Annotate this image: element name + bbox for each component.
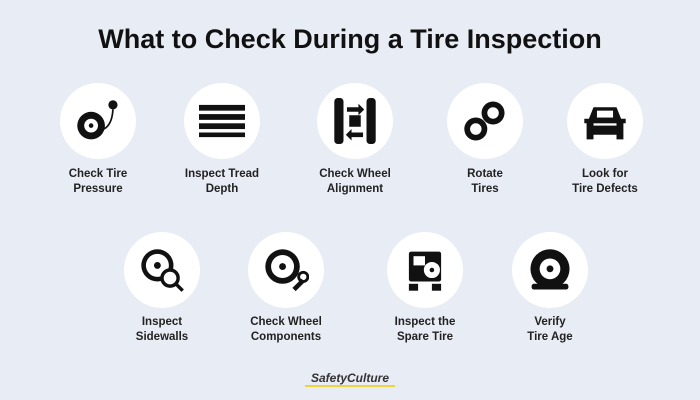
item: inspect spare tire bbox=[387, 232, 463, 308]
item: look for tire defects bbox=[567, 83, 643, 159]
label: inspect sidewalls bbox=[136, 316, 188, 343]
label: check wheel alignment: Alignment bbox=[327, 183, 383, 195]
label: inspect sidewalls: Sidewalls bbox=[136, 331, 188, 343]
label: look for tire defects: Tire Defects bbox=[572, 183, 638, 195]
item: verify tire age bbox=[512, 232, 588, 308]
label: inspect tread depth: Depth bbox=[206, 183, 238, 195]
label: inspect tread depth bbox=[185, 168, 259, 195]
label: inspect sidewalls: Inspect bbox=[142, 316, 182, 328]
label: check wheel components bbox=[250, 316, 322, 343]
item: inspect sidewalls bbox=[124, 232, 200, 308]
label: rotate tires: Rotate bbox=[467, 168, 503, 180]
label: check wheel components: Components bbox=[251, 331, 321, 343]
label: check tire pressure bbox=[69, 168, 127, 195]
label: check tire pressure: Check Tire bbox=[69, 168, 127, 180]
label: rotate tires: Tires bbox=[471, 183, 499, 195]
label: look for tire defects bbox=[572, 168, 638, 195]
item: inspect tread depth bbox=[184, 83, 260, 159]
label: inspect spare tire: Spare Tire bbox=[397, 331, 453, 343]
label: inspect spare tire bbox=[395, 316, 455, 343]
label: inspect spare tire: Inspect the bbox=[395, 316, 455, 328]
item: check wheel components bbox=[248, 232, 324, 308]
label: verify tire age: Verify bbox=[534, 316, 566, 328]
label: verify tire age: Tire Age bbox=[527, 331, 573, 343]
label: check wheel components: Check Wheel bbox=[250, 316, 322, 328]
item: check wheel alignment bbox=[317, 83, 393, 159]
label: rotate tires bbox=[467, 168, 503, 195]
label: look for tire defects: Look for bbox=[582, 168, 628, 180]
label: inspect tread depth: Inspect Tread bbox=[185, 168, 259, 180]
logo: SafetyCulture bbox=[311, 371, 389, 385]
title: What to Check During a Tire Inspection bbox=[98, 24, 602, 54]
label: check wheel alignment: Check Wheel bbox=[319, 168, 391, 180]
label: check tire pressure: Pressure bbox=[73, 183, 123, 195]
label: check wheel alignment bbox=[319, 168, 391, 195]
item: check tire pressure bbox=[60, 83, 136, 159]
item: rotate tires bbox=[447, 83, 523, 159]
label: verify tire age bbox=[527, 316, 573, 343]
